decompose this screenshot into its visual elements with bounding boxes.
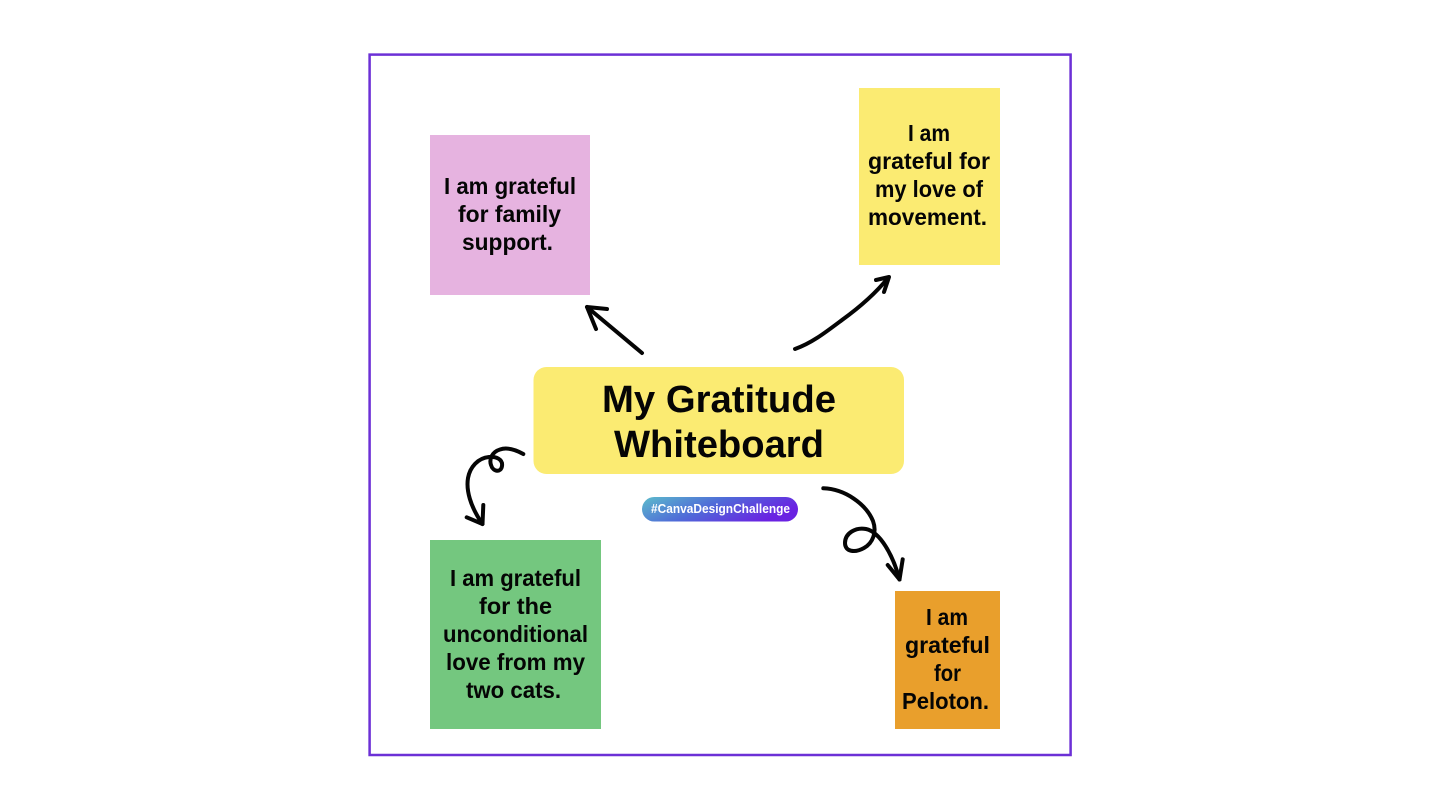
text: Peloton: grateful	[905, 632, 990, 658]
panel: orange note, Peloton	[895, 591, 1000, 729]
panel: central title box	[534, 367, 904, 474]
arrow: to yellow note	[795, 277, 889, 349]
arrow: looped, to orange note	[823, 488, 903, 580]
title: My Gratitude	[602, 379, 836, 421]
text: love of movement: grateful for	[868, 148, 990, 174]
text: Peloton: I am	[926, 604, 968, 630]
text: Peloton: for	[934, 660, 961, 686]
text: family support: support.	[462, 229, 553, 255]
text: two cats: two cats.	[466, 677, 561, 703]
text: love of movement: I am	[908, 120, 950, 146]
text: two cats: love from my	[446, 649, 585, 675]
panel: pink note, family support	[430, 135, 590, 295]
text: Peloton	[902, 604, 990, 714]
panel: yellow note, love of movement	[859, 88, 1000, 265]
text: family support	[444, 173, 576, 255]
title	[602, 379, 836, 466]
purple frame	[370, 55, 1071, 755]
text: love of movement	[868, 120, 990, 230]
arrow: to pink note	[587, 307, 642, 353]
text: love of movement: my love of	[875, 176, 983, 202]
text: love of movement: movement.	[868, 204, 987, 230]
text: family support: for family	[458, 201, 561, 227]
title: Whiteboard	[614, 424, 824, 466]
text: two cats: for the	[479, 593, 552, 619]
arrow: looped, to green note	[467, 449, 523, 524]
text: two cats	[443, 565, 588, 703]
panel: green note, two cats	[430, 540, 601, 729]
hashtag pill: #CanvaDesignChallenge	[651, 502, 790, 516]
hashtag pill	[642, 497, 798, 522]
text: two cats: unconditional	[443, 621, 588, 647]
text: family support: I am grateful	[444, 173, 576, 199]
text: two cats: I am grateful	[450, 565, 581, 591]
text: Peloton: Peloton.	[902, 688, 989, 714]
